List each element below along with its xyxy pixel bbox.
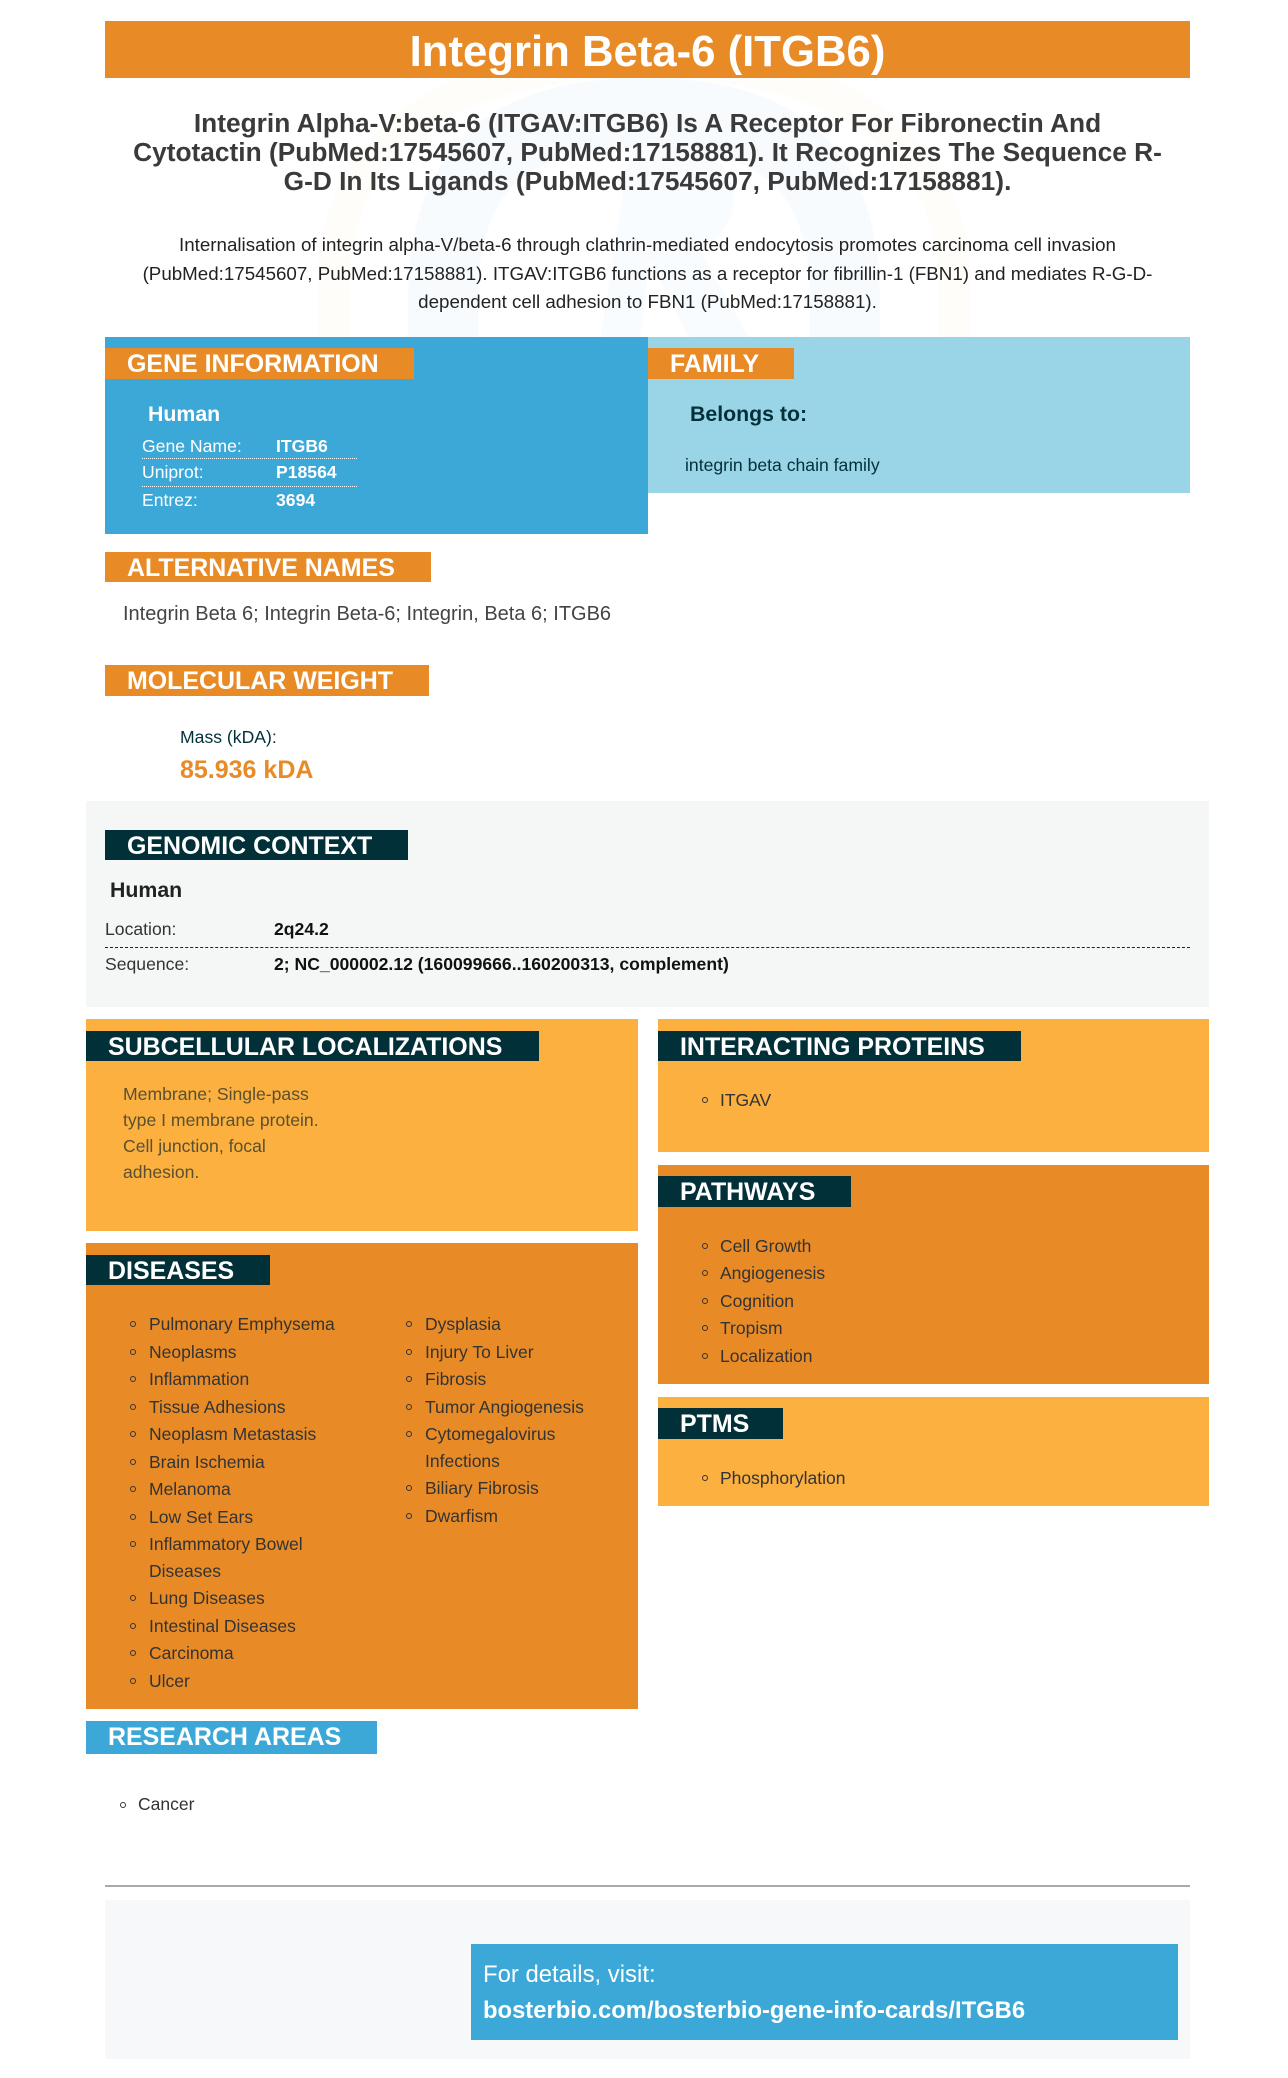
- disease list column 1: Pulmonary Emphysema: [149, 1314, 335, 1334]
- panel: subcellular localizations: [86, 1019, 638, 1231]
- uniprot row: P18564: [276, 462, 337, 482]
- item: Phosphorylation: [720, 1468, 846, 1488]
- panel: ptms: [658, 1397, 1209, 1506]
- species: Human: [110, 878, 182, 902]
- title: [105, 21, 1190, 78]
- disease list column 1: Intestinal Diseases: [149, 1616, 296, 1636]
- subtitle: G-D In Its Ligands (PubMed:17545607, PubMed:17158881).: [284, 166, 1011, 196]
- heading: genomic context: GENOMIC CONTEXT: [127, 832, 372, 860]
- disease list column 1: Ulcer: [149, 1671, 190, 1691]
- watermark logo: [0, 0, 1288, 340]
- disease list column 1: Lung Diseases: [149, 1588, 265, 1608]
- item: ITGAV: [720, 1090, 771, 1110]
- localization text: adhesion.: [123, 1162, 199, 1182]
- location row: [105, 919, 1190, 948]
- description: (PubMed:17545607, PubMed:17158881). ITGAV:ITGB6 functions as a receptor for fibrillin-1 (FBN1) and mediates R-G-D-: [143, 262, 1152, 284]
- heading: gene information: GENE INFORMATION: [127, 350, 379, 378]
- disease list column 2: Infections: [425, 1451, 500, 1471]
- heading: [86, 1255, 270, 1285]
- species: Human: [148, 402, 220, 426]
- disease list column 1: Melanoma: [149, 1479, 231, 1499]
- sequence row: 2; NC_000002.12 (160099666..160200313, complement): [274, 954, 729, 974]
- heading: [658, 1408, 783, 1439]
- gene name row: Gene Name:: [142, 436, 242, 456]
- panel: family: [648, 337, 1190, 493]
- heading: research areas: RESEARCH AREAS: [108, 1723, 341, 1751]
- disease list column 1: Inflammation: [149, 1369, 249, 1389]
- localization text: [123, 1084, 319, 1182]
- callout: details link: [471, 1944, 1178, 2040]
- family value: integrin beta chain family: [685, 455, 880, 475]
- heading: PATHWAYS: [680, 1178, 815, 1206]
- panel: footer: [105, 1900, 1190, 2059]
- heading: SUBCELLULAR LOCALIZATIONS: [108, 1033, 502, 1061]
- disease list column 1: Inflammatory Bowel: [149, 1534, 303, 1554]
- disease list column 1: Brain Ischemia: [149, 1452, 265, 1472]
- pathway list: Cell Growth: [720, 1236, 811, 1256]
- belongs to label: Belongs to:: [690, 402, 807, 426]
- panel: diseases: [86, 1243, 638, 1709]
- pathway list: [702, 1236, 825, 1366]
- panel: gene information: [105, 337, 648, 534]
- disease list column 1: Tissue Adhesions: [149, 1397, 286, 1417]
- heading: family: FAMILY: [670, 350, 759, 378]
- callout label: For details, visit:: [483, 1961, 656, 1988]
- disease list column 1: Neoplasms: [149, 1342, 237, 1362]
- research item: Cancer: [138, 1794, 194, 1814]
- disease list column 1: Neoplasm Metastasis: [149, 1424, 316, 1444]
- pathway list: Angiogenesis: [720, 1263, 825, 1283]
- location row: Location:: [105, 919, 176, 939]
- entrez row: Entrez:: [142, 490, 198, 510]
- sequence row: Sequence:: [105, 954, 189, 974]
- panel: genomic context: [86, 801, 1209, 1007]
- disease list column 1: [130, 1314, 335, 1691]
- location row: 2q24.2: [274, 919, 329, 939]
- localization text: Membrane; Single-pass: [123, 1084, 309, 1104]
- entrez row: [142, 490, 316, 510]
- uniprot row: [142, 462, 357, 487]
- disease list column 2: Cytomegalovirus: [425, 1424, 555, 1444]
- disease list column 1: Low Set Ears: [149, 1507, 253, 1527]
- alternative names text: Integrin Beta 6; Integrin Beta-6; Integrin, Beta 6; ITGB6: [123, 603, 611, 625]
- localization text: Cell junction, focal: [123, 1136, 266, 1156]
- subtitle: Cytotactin (PubMed:17545607, PubMed:17158881). It Recognizes The Sequence R-: [133, 137, 1162, 167]
- heading: molecular weight: MOLECULAR WEIGHT: [127, 667, 393, 695]
- pathway list: Cognition: [720, 1291, 794, 1311]
- callout url: bosterbio.com/bosterbio-gene-info-cards/ITGB6: [483, 1997, 1025, 2024]
- disease list column 2: Tumor Angiogenesis: [425, 1397, 584, 1417]
- disease list column 2: Injury To Liver: [425, 1342, 534, 1362]
- uniprot row: Uniprot:: [142, 462, 204, 482]
- bullet: [702, 1097, 708, 1103]
- disease list column 2: Dysplasia: [425, 1314, 501, 1334]
- panel: interacting proteins: [658, 1019, 1209, 1152]
- description: Internalisation of integrin alpha-V/beta-6 through clathrin-mediated endocytosis promotes carcinoma cell invasion: [179, 234, 1116, 255]
- entrez row: 3694: [276, 490, 315, 510]
- disease list column 2: Fibrosis: [425, 1369, 486, 1389]
- panel: pathways: [658, 1165, 1209, 1384]
- mass value: 85.936 kDA: [180, 756, 313, 784]
- mass label: Mass (kDA):: [180, 727, 277, 747]
- bullet: [702, 1475, 708, 1481]
- heading: INTERACTING PROTEINS: [680, 1033, 985, 1061]
- pathway list: Localization: [720, 1346, 812, 1366]
- pathway list: Tropism: [720, 1318, 783, 1338]
- heading: alternative names: ALTERNATIVE NAMES: [127, 554, 395, 582]
- heading: research areas: [86, 1721, 377, 1754]
- subtitle: Integrin Alpha-V:beta-6 (ITGAV:ITGB6) Is A Receptor For Fibronectin And: [194, 108, 1101, 138]
- disease list column 2: Dwarfism: [425, 1506, 498, 1526]
- heading: DISEASES: [108, 1257, 234, 1285]
- description: [143, 234, 1152, 312]
- footer rule: [105, 1885, 1190, 1887]
- description: dependent cell adhesion to FBN1 (PubMed:17158881).: [418, 291, 877, 312]
- bullet: [120, 1802, 126, 1808]
- heading: family: [648, 348, 794, 379]
- disease list column 1: Carcinoma: [149, 1643, 234, 1663]
- gene name row: ITGB6: [276, 436, 328, 456]
- disease list column 2: Biliary Fibrosis: [425, 1478, 539, 1498]
- disease list column 2: [406, 1314, 584, 1526]
- subtitle: [133, 108, 1162, 196]
- heading: [658, 1176, 851, 1207]
- heading: PTMS: [680, 1410, 749, 1438]
- disease list column 1: Diseases: [149, 1561, 221, 1581]
- title: Integrin Beta-6 (ITGB6): [410, 27, 885, 76]
- gene name row: [142, 436, 357, 459]
- localization text: type I membrane protein.: [123, 1110, 319, 1130]
